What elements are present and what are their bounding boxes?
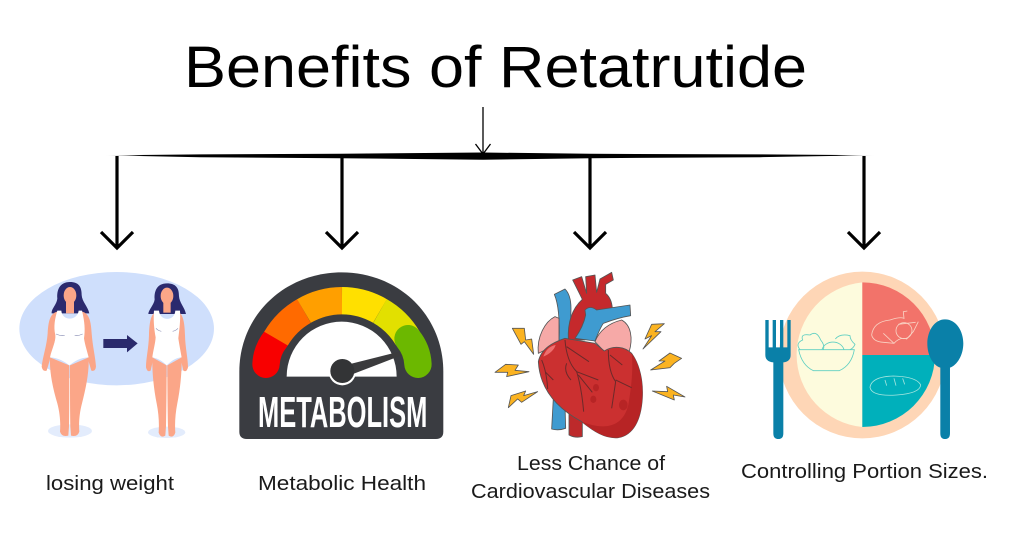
arrow: to losing weight bbox=[101, 156, 133, 248]
fork bbox=[765, 320, 791, 439]
title: Benefits of Retatrutide bbox=[184, 35, 807, 100]
arrow: to portion sizes bbox=[848, 156, 880, 248]
connector: top arrow and horizontal bar bbox=[105, 107, 875, 160]
gauge needle bbox=[329, 352, 401, 385]
roast chicken bbox=[872, 311, 918, 343]
label: metabolic health: Metabolic Health bbox=[258, 473, 426, 495]
label: cardiovascular diseases bbox=[471, 453, 710, 503]
gauge label: METABOLISM bbox=[258, 388, 427, 437]
arrow: to metabolic health bbox=[326, 156, 358, 248]
bread loaf bbox=[870, 376, 921, 395]
label: portion sizes: Controlling Portion Sizes. bbox=[741, 461, 988, 483]
arrow: to cardiovascular bbox=[574, 156, 606, 248]
label: losing weight: losing weight bbox=[46, 473, 174, 495]
figure: after bbox=[146, 283, 188, 437]
arrow: before to after bbox=[103, 335, 138, 352]
icon: heart bbox=[495, 272, 685, 438]
coronary vessels bbox=[542, 340, 632, 412]
salad bowl bbox=[798, 333, 855, 371]
icon: weight loss illustration bbox=[19, 272, 214, 438]
label: cardiovascular diseases: Less Chance of bbox=[517, 453, 665, 475]
label: cardiovascular diseases: Cardiovascular Diseases bbox=[471, 481, 710, 503]
icon: portion plate bbox=[765, 272, 963, 439]
lightning bolts bbox=[495, 324, 685, 408]
figure: before bbox=[42, 282, 96, 436]
icon: metabolism gauge bbox=[239, 272, 443, 439]
spoon bbox=[927, 319, 963, 439]
